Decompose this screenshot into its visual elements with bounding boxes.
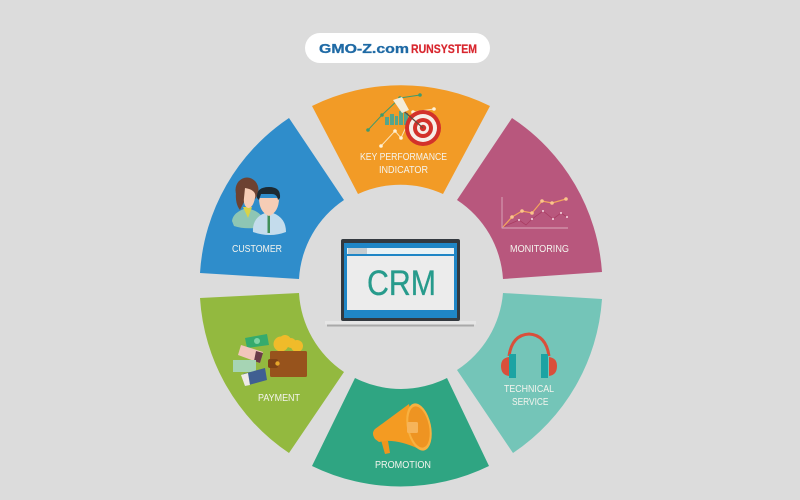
icon: wallet and banknotes xyxy=(233,334,307,386)
label: technical: TECHNICAL xyxy=(504,384,554,395)
logo text: GMO-Z.com: GMO-Z.com xyxy=(319,41,409,56)
panel: promotion xyxy=(312,378,489,486)
panel: payment xyxy=(200,293,344,453)
logo pill xyxy=(305,33,490,63)
panel: customer xyxy=(200,118,344,279)
logo text: RUNSYSTEM: RUNSYSTEM xyxy=(411,44,477,56)
panel: key performance indicator xyxy=(312,85,490,194)
label: customer: CUSTOMER xyxy=(232,244,282,255)
panel: technical service xyxy=(457,293,602,453)
icon: target with chart xyxy=(366,93,441,148)
panel: monitoring xyxy=(457,118,602,279)
label: payment: PAYMENT xyxy=(258,393,300,404)
icon: headphones xyxy=(501,334,557,378)
icon: megaphone xyxy=(373,401,436,454)
label: service: SERVICE xyxy=(512,397,549,408)
label: monitoring: MONITORING xyxy=(510,244,569,255)
icon: two people xyxy=(232,178,286,235)
label: CRM: CRM xyxy=(367,264,436,303)
icon: line chart xyxy=(502,197,568,228)
label: key performance: KEY PERFORMANCE xyxy=(360,152,447,163)
label: indicator: INDICATOR xyxy=(379,165,428,176)
label: promotion: PROMOTION xyxy=(375,460,431,471)
center laptop xyxy=(325,239,476,326)
